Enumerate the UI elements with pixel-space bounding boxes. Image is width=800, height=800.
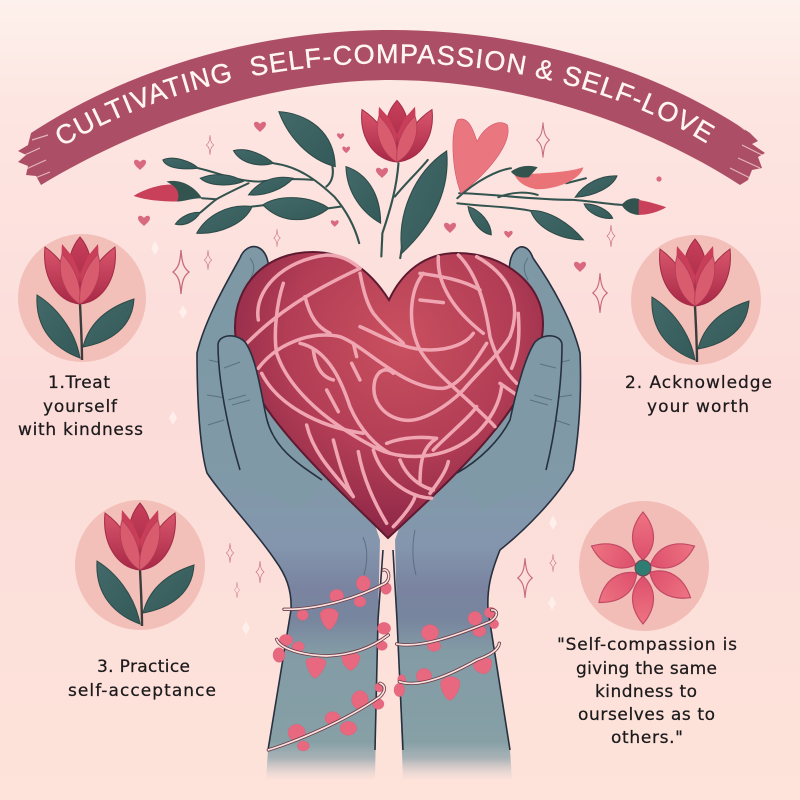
text: quote: others." (611, 728, 683, 748)
left hand (197, 247, 383, 780)
text: step 2 (625, 373, 772, 417)
wrist bands with heart beads (268, 570, 499, 751)
text: quote: kindness to (595, 682, 697, 702)
text: quote: giving the same (576, 659, 717, 679)
text: step 1: 1.Treat (48, 373, 110, 393)
icon: tulip 3 (75, 500, 205, 630)
panel: treat yourself (18, 234, 146, 440)
icon: top tulip (362, 100, 432, 162)
text: step 3: 3. Practice (97, 657, 190, 677)
text: step 3: self-acceptance (68, 681, 216, 701)
text: step 2: 2. Acknowledge (625, 373, 772, 393)
text: step 1: with kindness (18, 420, 143, 440)
small hearts and sparkles (134, 122, 742, 635)
title: CULTIVATING SELF-COMPASSION & SELF-LOVE (56, 44, 716, 144)
text: step 3 (68, 657, 216, 701)
text: quote: "Self-compassion is (557, 635, 737, 655)
text: quote (557, 635, 737, 748)
icon: tulip 2 (631, 235, 761, 365)
text: step 1: yourself (43, 397, 118, 417)
left thumb (218, 336, 322, 510)
right hand (393, 247, 581, 780)
right thumb (457, 336, 562, 510)
heart strands (247, 255, 519, 527)
panel: quote (557, 501, 737, 748)
banner (18, 30, 765, 185)
text: step 1 (18, 373, 143, 440)
text: step 2: your worth (647, 397, 749, 417)
heart (235, 252, 543, 538)
panel: self-acceptance (68, 500, 216, 701)
panel: acknowledge worth (625, 235, 772, 417)
top floral spray (134, 112, 666, 258)
text: quote: ourselves as to (578, 705, 715, 725)
icon: pink flower (579, 501, 709, 631)
icon: tulip 1 (18, 234, 146, 362)
